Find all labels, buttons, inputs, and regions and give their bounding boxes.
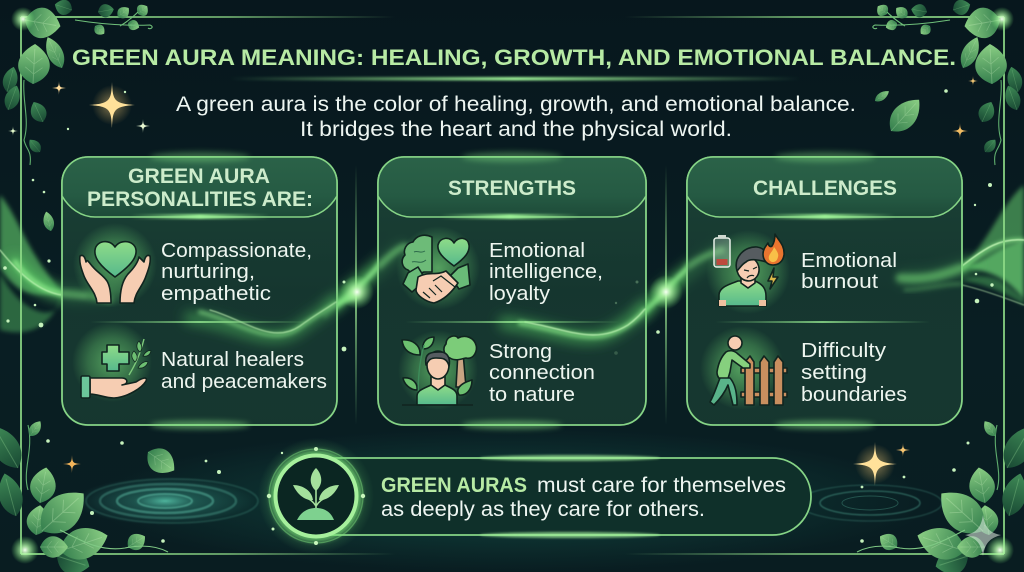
callout text: as deeply as they care for others. [381,498,705,521]
panel glow waves [379,246,645,338]
text: natural healers and peacemakers: Natural healers [161,348,304,371]
water ripples [75,477,942,525]
text: strong connection to nature [489,340,595,406]
intro text: It bridges the heart and the physical world. [300,118,732,141]
text: compassionate, nurturing, empathetic [161,239,312,305]
panel glow accents [150,152,875,429]
text: difficulty setting boundaries: Difficulty [801,339,887,362]
text: strong connection to nature: connection [489,361,595,384]
text: emotional intelligence, loyalty: Emotional [489,239,585,262]
panel header [378,157,646,219]
icon: glowing ring with sprout [258,438,374,554]
icon: hands holding heart [73,223,157,307]
text: compassionate, nurturing, empathetic: empathetic [161,282,271,305]
text: natural healers and peacemakers: and peacemakers [161,370,327,393]
text: emotional burnout: Emotional [801,249,897,272]
panel header [62,157,337,219]
text: emotional intelligence, loyalty: intelligence, [489,260,603,283]
text: emotional intelligence, loyalty [489,239,603,305]
panel: challenges [687,157,962,425]
text: compassionate, nurturing, empathetic: Compassionate, [161,239,312,262]
title: GREEN AURA MEANING: HEALING, GROWTH, AND EMOTIONAL BALANCE. [72,45,956,70]
sparkles and particles [3,76,994,543]
floating leaves [41,88,928,480]
callout text [381,474,786,521]
text: strong connection to nature: to nature [489,383,575,406]
text: emotional burnout: burnout [801,270,878,293]
corner foliage: top right [873,0,1024,165]
light flares between panels [340,275,683,309]
panel header: CHALLENGES [753,177,897,200]
text: compassionate, nurturing, empathetic: nurturing, [161,260,255,283]
title [72,45,956,80]
icon: healing hand with cross and sprig [72,322,152,402]
text: emotional intelligence, loyalty: loyalty [489,282,551,305]
text: difficulty setting boundaries: setting [801,361,867,384]
panel glow waves [688,250,961,290]
text: strong connection to nature: Strong [489,340,552,363]
text: emotional burnout [801,249,897,293]
callout text: must care for themselves [537,474,786,497]
panel: green aura personalities [62,157,337,425]
panel glow waves [63,293,336,337]
panel: strengths [378,157,646,425]
corner foliage: top left [0,0,152,165]
icon: burnout person with battery and flame [706,230,790,314]
flowing green energy waves [0,165,1024,425]
corner foliage: bottom right [857,418,1024,572]
text: natural healers and peacemakers [161,348,327,393]
callout: care for themselves [258,438,811,554]
icon: person in nature [398,330,478,410]
panel header: GREEN AURA [128,165,270,188]
corner foliage: bottom left [0,418,168,572]
panel header: PERSONALITIES ARE: [87,188,313,211]
icon: person pushing fence [700,326,787,410]
panel header [687,157,962,219]
intro text [176,93,856,141]
icon: brain, heart and handshake [396,226,480,310]
intro text: A green aura is the color of healing, growth, and emotional balance. [176,93,856,116]
sparkle watermark [965,515,1001,556]
callout text: GREEN AURAS [381,474,527,497]
text: difficulty setting boundaries [801,339,907,406]
panel header: STRENGTHS [448,177,576,200]
text: difficulty setting boundaries: boundaries [801,383,907,406]
